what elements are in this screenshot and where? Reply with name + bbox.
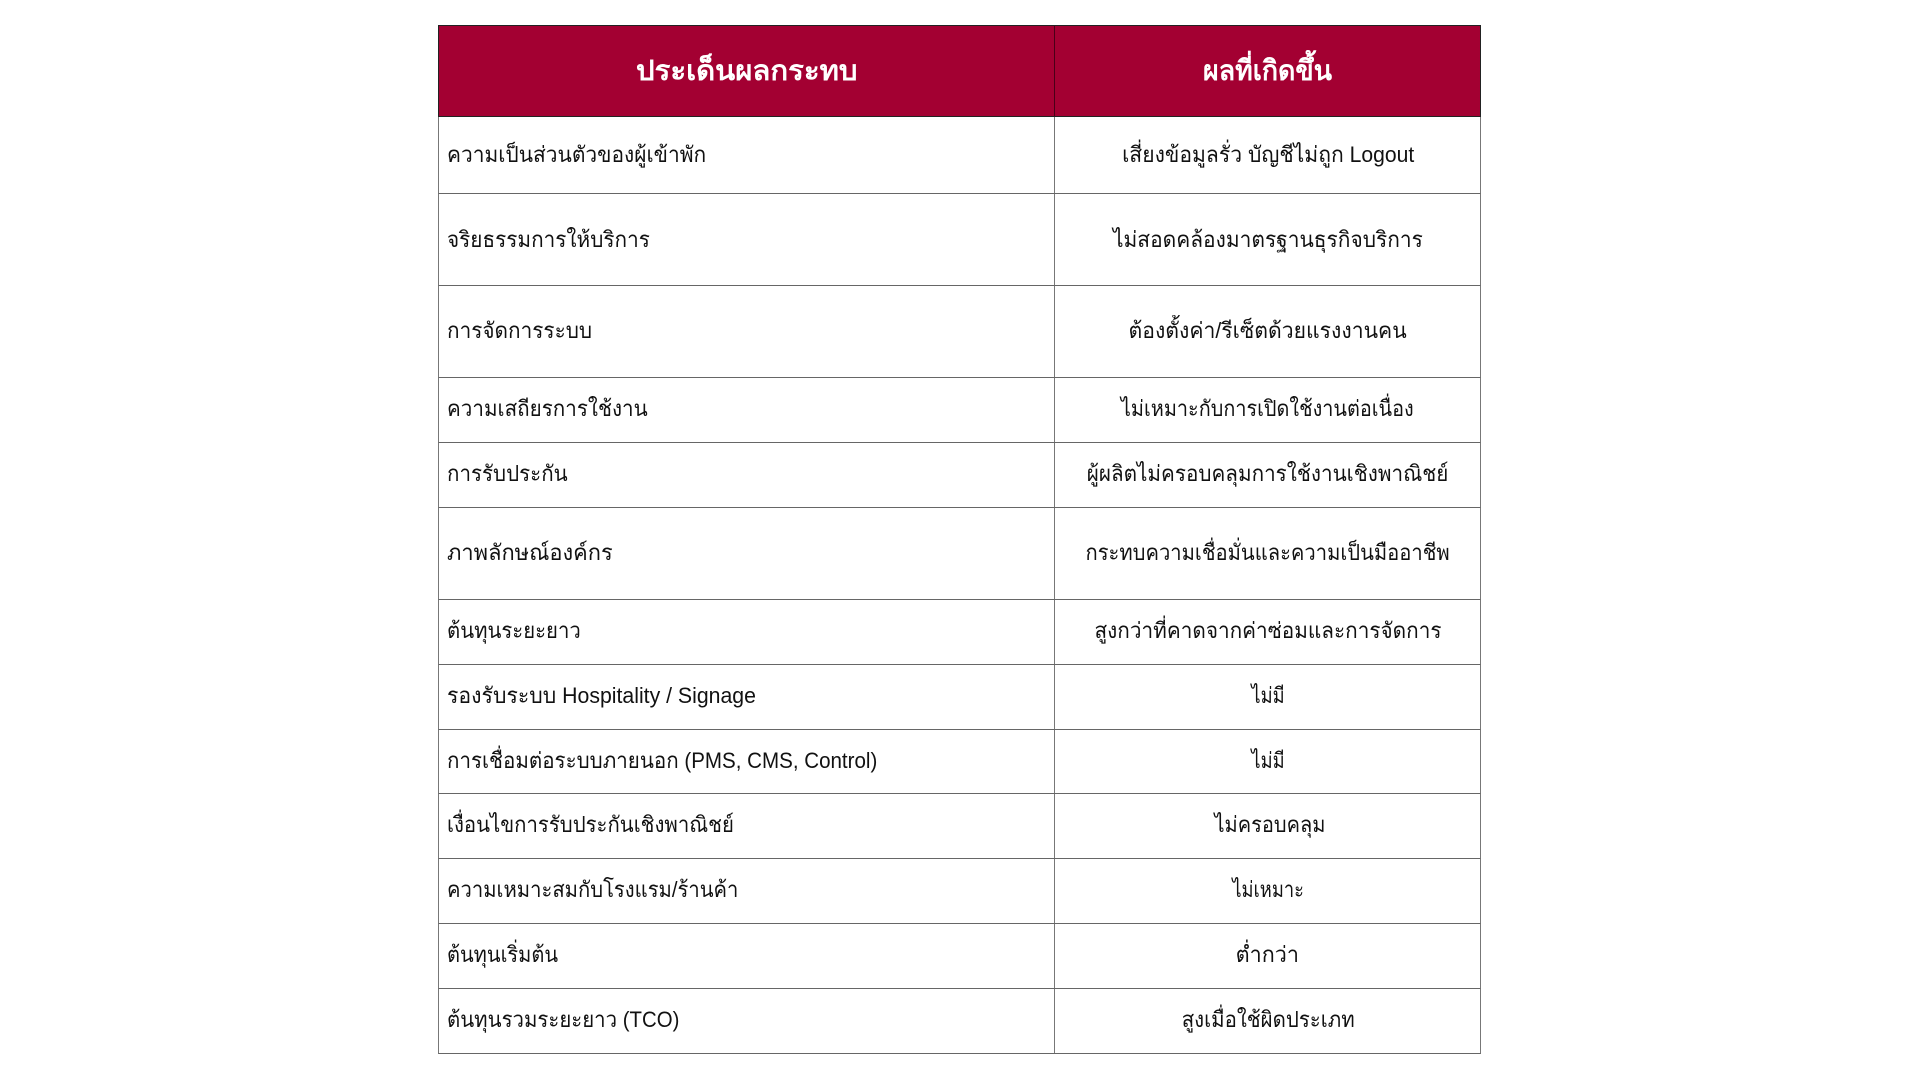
outcome text [1054, 194, 1480, 285]
outcome text: สูงเมื่อใช้ผิดประเภท [1181, 1007, 1354, 1032]
row: commercial warranty terms [438, 794, 1481, 859]
column heading: outcome: ผลที่เกิดขึ้น [1203, 55, 1332, 86]
outcome text: ต่ำกว่า [1236, 942, 1299, 967]
outcome text [1054, 443, 1480, 507]
outcome text: ไม่มี [1251, 683, 1284, 708]
row: total cost of ownership [438, 989, 1481, 1054]
outcome text: เสี่ยงข้อมูลรั่ว บัญชีไม่ถูก Logout [1122, 142, 1414, 167]
issue text: จริยธรรมการให้บริการ [447, 226, 650, 252]
header row [438, 25, 1481, 117]
issue text: รองรับระบบ Hospitality / Signage [447, 683, 756, 708]
outcome text [1054, 730, 1480, 793]
row: long-term cost [438, 600, 1481, 665]
outcome text: สูงกว่าที่คาดจากค่าซ่อมและการจัดการ [1094, 618, 1441, 643]
outcome text [1054, 378, 1480, 442]
row: initial cost [438, 924, 1481, 989]
row: external integration [438, 730, 1481, 794]
outcome text: ไม่เหมาะกับการเปิดใช้งานต่อเนื่อง [1121, 396, 1414, 421]
outcome text [1054, 794, 1480, 858]
issue text: การเชื่อมต่อระบบภายนอก (PMS, CMS, Control) [447, 748, 877, 772]
row: guest privacy [438, 117, 1481, 194]
outcome text: ไม่เหมาะ [1232, 877, 1304, 902]
issue text: ความเหมาะสมกับโรงแรม/ร้านค้า [447, 877, 738, 902]
outcome text [1054, 117, 1480, 193]
outcome text [1054, 665, 1480, 729]
outcome text [1054, 859, 1480, 923]
row: warranty [438, 443, 1481, 508]
outcome text [1054, 508, 1480, 599]
row: service ethics [438, 194, 1481, 286]
outcome text [1054, 600, 1480, 664]
issue text: การรับประกัน [447, 461, 568, 486]
outcome text [1054, 286, 1480, 377]
issue text: เงื่อนไขการรับประกันเชิงพาณิชย์ [447, 812, 734, 837]
outcome text: ไม่สอดคล้องมาตรฐานธุรกิจบริการ [1113, 226, 1423, 252]
outcome text: ผู้ผลิตไม่ครอบคลุมการใช้งานเชิงพาณิชย์ [1087, 461, 1449, 486]
issue text: ความเป็นส่วนตัวของผู้เข้าพัก [447, 142, 706, 167]
comparison table [438, 25, 1481, 1054]
outcome text: ไม่มี [1251, 748, 1284, 772]
issue text: ต้นทุนเริ่มต้น [447, 942, 558, 967]
column heading: outcome [1054, 26, 1480, 116]
row: stability [438, 378, 1481, 443]
outcome text [1054, 924, 1480, 988]
outcome text [1054, 989, 1480, 1053]
row: hotel and retail suitability [438, 859, 1481, 924]
column heading: impact issue: ประเด็นผลกระทบ [636, 55, 857, 86]
outcome text: กระทบความเชื่อมั่นและความเป็นมืออาชีพ [1086, 540, 1450, 564]
outcome text: ไม่ครอบคลุม [1215, 812, 1326, 837]
issue text: การจัดการระบบ [447, 318, 592, 342]
row: system management [438, 286, 1481, 378]
row: corporate image [438, 508, 1481, 600]
issue text: ต้นทุนระยะยาว [447, 618, 581, 643]
row: hospitality support [438, 665, 1481, 730]
outcome text: ต้องตั้งค่า/รีเซ็ตด้วยแรงงานคน [1129, 318, 1407, 342]
issue text: ความเสถียรการใช้งาน [447, 396, 648, 421]
issue text: ภาพลักษณ์องค์กร [447, 540, 613, 564]
issue text: ต้นทุนรวมระยะยาว (TCO) [447, 1007, 679, 1032]
